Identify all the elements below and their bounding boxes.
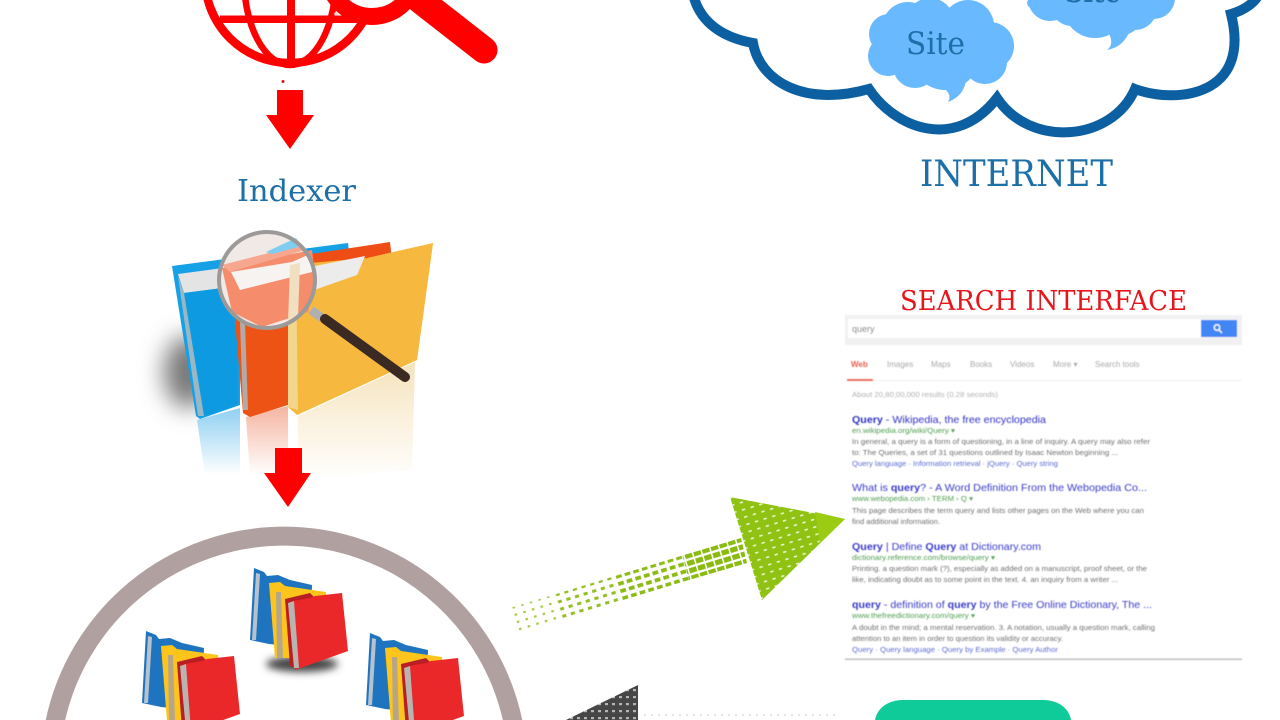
result 2: What is query? - A Word Definition From the Webopedia Co... bbox=[852, 482, 1147, 494]
arrow: indexer to index bbox=[264, 448, 311, 507]
navigation tabs: Images bbox=[887, 360, 913, 369]
result 3: like, indicating doubt as to some point in the text. 4. an inquiry from a writer ... bbox=[852, 575, 1118, 584]
arrow: globe to indexer bbox=[266, 80, 314, 149]
folders: top group bbox=[250, 568, 348, 672]
result 1 bbox=[852, 414, 1151, 468]
index circle with folders bbox=[55, 536, 513, 720]
result 3 bbox=[852, 541, 1147, 584]
icon: globe with magnifying glass bbox=[205, 0, 484, 67]
result 4: query - definition of query by the Free Online Dictionary, The ... bbox=[852, 599, 1152, 611]
shadow behind folders bbox=[164, 336, 212, 408]
arrow: grey halftone bbox=[566, 685, 840, 720]
result 4 bbox=[851, 599, 1155, 654]
speech cloud: Site: Site bbox=[906, 26, 965, 62]
illustration: cloud representing the internet bbox=[693, 0, 1260, 132]
result 4: Query · Query language · Query by Example · Query Author bbox=[852, 645, 1059, 654]
result 2: www.webopedia.com › TERM › Q ▾ bbox=[851, 494, 973, 503]
navigation tabs: Web bbox=[851, 360, 868, 369]
result 2: This page describes the term query and lists other pages on the Web where you can bbox=[852, 506, 1144, 515]
result 1: Query - Wikipedia, the free encyclopedia bbox=[852, 414, 1046, 426]
result 3: Printing. a question mark (?), especially as added on a manuscript, proof sheet, or the bbox=[852, 564, 1147, 573]
result 2: find additional information. bbox=[852, 517, 940, 526]
result 1: en.wikipedia.org/wiki/Query ▾ bbox=[852, 426, 955, 435]
button: green bbox=[875, 700, 1071, 720]
folders: left group bbox=[142, 631, 240, 720]
navigation tabs: Books bbox=[970, 360, 992, 369]
navigation tabs: Maps bbox=[931, 360, 951, 369]
result 2 bbox=[851, 482, 1147, 526]
search results screenshot bbox=[845, 315, 1242, 660]
heading: SEARCH INTERFACE: SEARCH INTERFACE bbox=[900, 286, 1187, 317]
illustration: folders with magnifying glass bbox=[172, 232, 433, 480]
result 3: Query | Define Query at Dictionary.com bbox=[852, 541, 1041, 553]
result 1: to: The Queries, a set of 31 questions outlined by Isaac Newton beginning ... bbox=[852, 448, 1118, 457]
search bar bbox=[845, 315, 1242, 345]
arrow: green halftone pointing to search interface bbox=[510, 497, 845, 632]
result 1: In general, a query is a form of questioning, in a line of inquiry. A query may also refer bbox=[852, 437, 1151, 446]
label: INTERNET: INTERNET bbox=[920, 154, 1113, 195]
result 4: A doubt in the mind; a mental reservation. 3. A notation, usually a question mark, calling bbox=[852, 623, 1155, 632]
result 4: attention to an item in order to question its validity or accuracy. bbox=[852, 634, 1063, 643]
navigation tabs: Videos bbox=[1010, 360, 1034, 369]
folders: right group bbox=[366, 633, 464, 720]
navigation tabs: More ▾ bbox=[1053, 360, 1077, 369]
heading: Indexer: Indexer bbox=[237, 174, 357, 209]
navigation tabs bbox=[847, 360, 1242, 381]
speech cloud: Site bbox=[868, 0, 1014, 102]
result 1: Query language · Information retrieval · jQuery · Query string bbox=[852, 459, 1058, 468]
search bar: query bbox=[852, 324, 875, 334]
navigation tabs: Search tools bbox=[1095, 360, 1139, 369]
result count: About 20,80,00,000 results (0.28 seconds) bbox=[852, 390, 999, 399]
result 4: www.thefreedictionary.com/query ▾ bbox=[851, 611, 975, 620]
result 3: dictionary.reference.com/browse/query ▾ bbox=[852, 553, 995, 562]
speech cloud: Site (top, cropped) bbox=[1027, 0, 1175, 50]
